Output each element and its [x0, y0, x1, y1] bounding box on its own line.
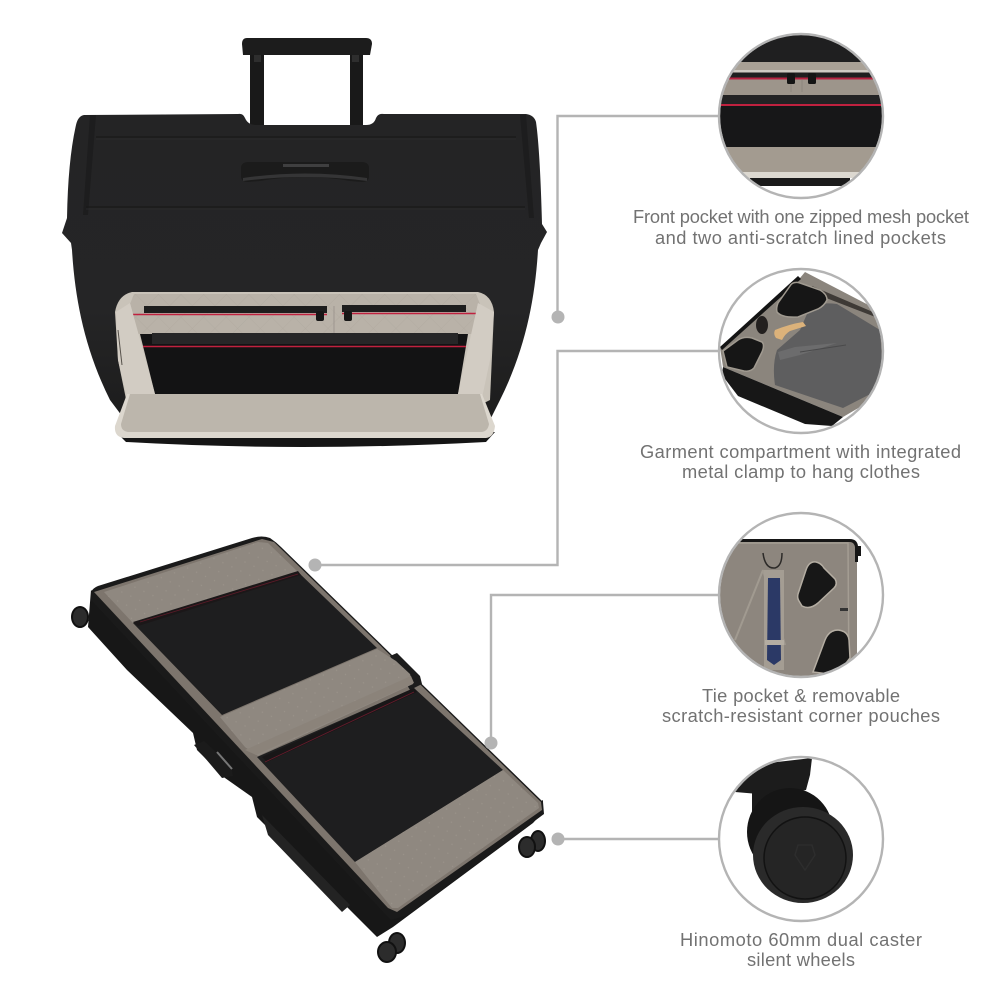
- hook: [763, 553, 782, 568]
- leader line 4: [552, 832, 718, 846]
- seams: [86, 137, 525, 207]
- detail circle: tie pocket: [718, 512, 884, 680]
- upper mesh panel: [133, 571, 377, 715]
- outer shell underside: [88, 590, 543, 937]
- lining rim: [94, 539, 542, 912]
- caption: tie pocket: Tie pocket & removable: [702, 685, 900, 706]
- caption: dual caster wheel: [680, 929, 922, 970]
- logo: [795, 845, 815, 870]
- caption: dual caster wheel: Hinomoto 60mm dual caster: [680, 929, 922, 950]
- detail circle: garment compartment: [718, 268, 884, 434]
- detail circle: front pocket: [718, 34, 884, 198]
- side lining triangles: [116, 303, 155, 398]
- caption: front pocket: and two anti-scratch lined pockets: [655, 227, 946, 248]
- strap lines: [735, 570, 785, 645]
- open front pocket: [115, 292, 494, 404]
- corner pouches: [777, 282, 827, 317]
- carry handle: [241, 162, 369, 182]
- pocket lining frame: [115, 292, 494, 404]
- lining top panel: [104, 542, 298, 623]
- bottom side handle: [194, 741, 233, 778]
- shell rim: [91, 536, 544, 920]
- middle lining band: [220, 649, 413, 756]
- detail circle: dual caster wheel: [718, 757, 884, 923]
- telescopic handle: [242, 38, 372, 128]
- upper pocket panel: [130, 303, 478, 334]
- wheels: [72, 607, 545, 962]
- tie: [767, 578, 781, 665]
- caption: tie pocket: [662, 685, 940, 726]
- pouches: [798, 562, 836, 607]
- caption: tie pocket: scratch-resistant corner pouches: [662, 705, 940, 726]
- rear wheel: [747, 790, 830, 854]
- zip pulls: [316, 311, 324, 321]
- caption: front pocket: [633, 206, 969, 248]
- hub: [764, 817, 846, 899]
- hanger: [774, 322, 806, 340]
- suitcase body: [62, 114, 547, 440]
- leader line 1: [552, 116, 718, 324]
- leader line 2: [308, 351, 718, 572]
- side bindings: [83, 115, 534, 218]
- leader line 3: [484, 595, 718, 750]
- suitcase: open flat view: [72, 536, 545, 962]
- mesh pocket: [140, 334, 468, 394]
- clamp: [756, 316, 768, 334]
- caption: garment compartment: Garment compartment with integrated: [640, 441, 961, 462]
- jacket: [774, 303, 884, 408]
- suitcase: front view with open front pocket: [62, 38, 547, 447]
- caption: garment compartment: [640, 441, 961, 482]
- lining bottom panel: [355, 770, 539, 908]
- side handle: [390, 653, 422, 690]
- lower mesh panel: [257, 688, 503, 862]
- caption: front pocket: Front pocket with one zipped mesh pocket: [633, 206, 969, 227]
- open pocket flap: [115, 394, 495, 447]
- upper zips: [144, 305, 466, 313]
- caption: garment compartment: metal clamp to hang clothes: [682, 461, 920, 482]
- front wheel: [753, 807, 853, 903]
- arm: [735, 758, 812, 795]
- caption: dual caster wheel: silent wheels: [747, 949, 855, 970]
